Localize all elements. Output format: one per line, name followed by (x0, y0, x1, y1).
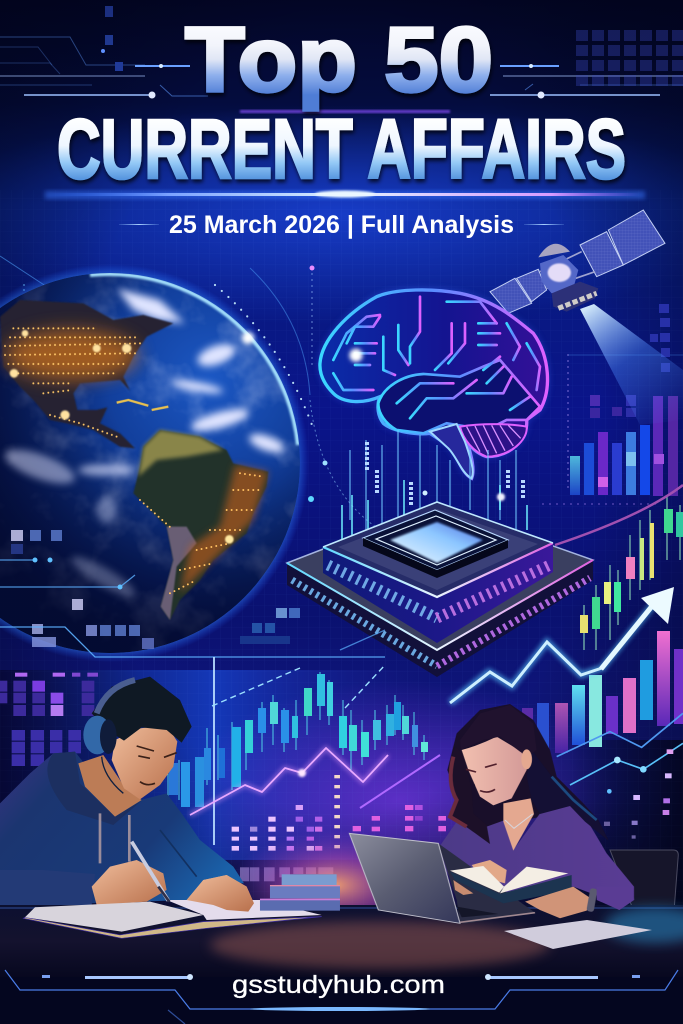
curve to right edge (555, 485, 683, 545)
lower cells (12, 730, 81, 766)
limb light (90, 274, 298, 445)
chair (610, 850, 678, 912)
candlestick chart center (168, 672, 428, 810)
front hair left (449, 747, 490, 844)
bar chart right (570, 395, 678, 496)
pixel chart lower left (0, 673, 98, 766)
pixel blocks around earth bottom (11, 530, 300, 649)
neck (503, 798, 534, 851)
hand on notebook overlay (187, 875, 254, 912)
top hand (472, 860, 507, 883)
long hair (447, 704, 608, 843)
faint network lines (0, 256, 683, 530)
face (462, 737, 527, 805)
bars lower right (522, 631, 683, 753)
bright cities (10, 330, 131, 420)
student woman (349, 704, 634, 923)
data streams below brain (342, 430, 527, 540)
front hair right (527, 750, 608, 841)
andes (160, 526, 197, 620)
laptop (349, 833, 535, 923)
eyes and mouth (137, 746, 177, 785)
brain circuitry (333, 297, 540, 418)
city lights north america (5, 328, 142, 437)
brain (320, 290, 547, 478)
glowing pixel chart center (232, 775, 340, 881)
middle layer sides (323, 543, 553, 643)
upper candlesticks right (580, 495, 683, 650)
solar panel right (580, 210, 665, 277)
pixel dots (604, 749, 673, 839)
hood shading (47, 752, 142, 825)
middle layer top (323, 502, 553, 597)
sao paulo glow (225, 535, 234, 544)
warm glow behind desk (230, 830, 440, 940)
lines lower right (557, 713, 683, 839)
title (57, 9, 626, 196)
footer website: gsstudyhub.com (232, 971, 445, 999)
pen (132, 842, 168, 901)
die (363, 510, 508, 570)
pen nib (158, 887, 169, 902)
brain outline (320, 290, 547, 478)
pixel blocks right edge (650, 304, 670, 372)
chip (287, 502, 593, 677)
south america (133, 430, 268, 620)
circuit lines top left (0, 6, 208, 98)
footer circuit frame (5, 970, 678, 1024)
neck (78, 755, 142, 817)
student man (0, 677, 254, 915)
top strip (15, 673, 98, 677)
holding hand (525, 887, 593, 918)
face (112, 725, 177, 799)
face details (466, 764, 497, 792)
globe (0, 270, 300, 660)
hoodie (0, 752, 244, 915)
glow north america (5, 330, 138, 380)
north america (0, 300, 173, 448)
left hand (453, 880, 473, 895)
book stack (260, 874, 340, 911)
upper cells (0, 681, 94, 716)
outer base top (287, 505, 593, 650)
necklace (505, 814, 533, 828)
brain stem (430, 424, 473, 478)
title line: Top 50: Top 50 (185, 9, 493, 111)
bottom panel (0, 977, 683, 1024)
resting hand (187, 875, 254, 912)
ear and earring (521, 749, 532, 769)
vertical cell column (334, 775, 340, 848)
cerebellum ridges (467, 425, 521, 454)
flare (242, 332, 254, 344)
satellite beam (580, 304, 683, 425)
outer base bottom (287, 560, 593, 677)
hair (92, 677, 192, 743)
glow south america (180, 465, 268, 593)
right arm shading (160, 830, 197, 877)
cerebellum (460, 424, 527, 457)
paper sheet (504, 920, 652, 949)
amazon highlights (138, 430, 223, 477)
continents and lights (0, 288, 286, 620)
headphones (83, 680, 135, 793)
watch (586, 888, 598, 912)
satellite body (538, 244, 598, 312)
satellite (490, 210, 665, 313)
circuit lines top right (490, 30, 683, 98)
brain hotspot (349, 349, 363, 362)
table (0, 905, 683, 977)
connector lines middle (0, 558, 385, 845)
sleeve end (597, 887, 634, 910)
sweater (439, 803, 634, 910)
glowing divider (45, 190, 645, 199)
city lights south america (140, 473, 263, 593)
glowing glass (390, 522, 483, 563)
sleeve cuff (0, 870, 95, 915)
line chart center (190, 665, 440, 815)
purple line above headline (240, 110, 450, 113)
clouds (1, 288, 286, 602)
arrow (450, 587, 674, 703)
pink cells by woman (353, 805, 446, 831)
subtitle: 25 March 2026 | Full Analysis (169, 211, 514, 239)
writing hand (92, 860, 167, 905)
open notebook (23, 875, 322, 938)
brain glow (320, 290, 547, 478)
pale cells (240, 867, 333, 881)
temporal lobe (378, 360, 540, 433)
hair highlight (450, 757, 467, 827)
earth (0, 264, 309, 662)
reading book (450, 866, 572, 903)
solar panel left (490, 269, 547, 313)
earth halo (0, 264, 309, 662)
hoodie strings (100, 813, 129, 863)
hair top (460, 705, 537, 757)
caribbean (117, 400, 168, 410)
